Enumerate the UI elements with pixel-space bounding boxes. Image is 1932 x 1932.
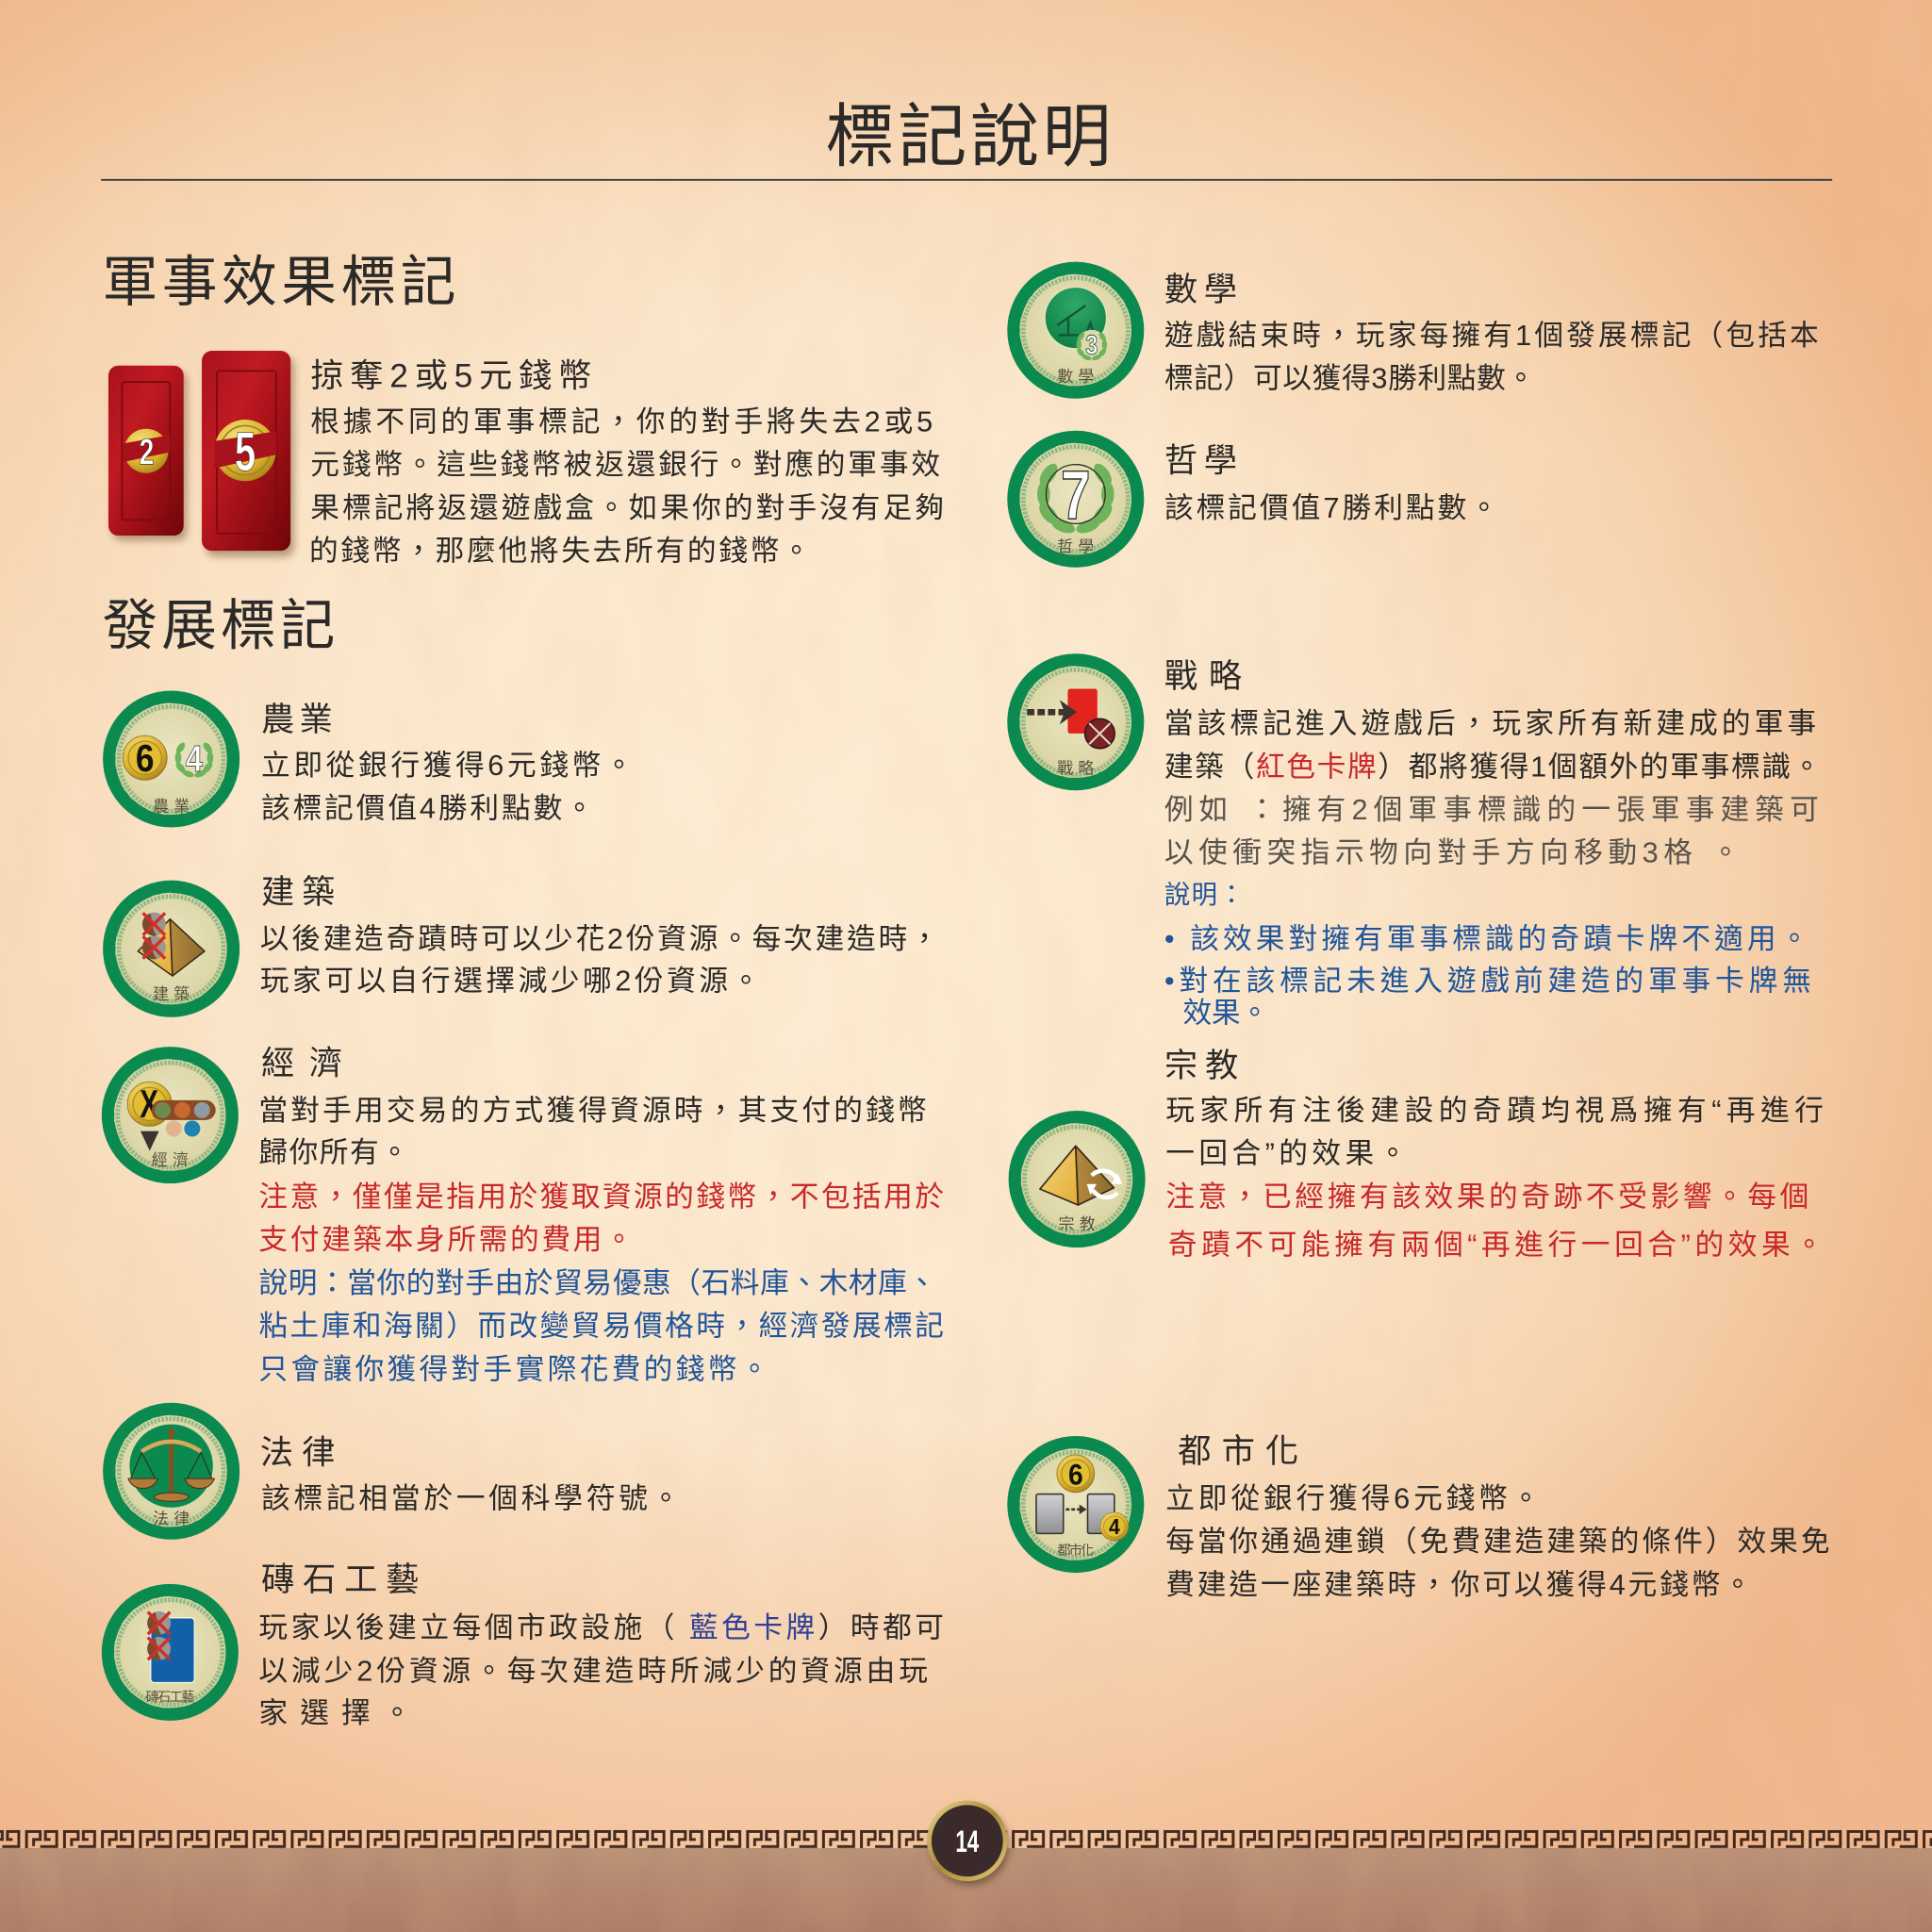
token: urbanism <box>1007 1436 1144 1573</box>
token: law <box>103 1403 239 1540</box>
text: masonry <box>258 1561 944 1729</box>
text: law: 該標記相當於一個科學符號。 <box>261 1481 680 1514</box>
heading: military tokens: 軍事效果標記 <box>102 252 456 313</box>
text: plunder: 的錢幣，那麼他將失去所有的錢幣。 <box>309 535 811 568</box>
text: economy <box>258 1045 944 1385</box>
text: economy: 粘土庫和海關）而改變貿易價格時，經濟發展標記 <box>258 1310 944 1343</box>
token: masonry: 磚石工藝 <box>145 1690 194 1706</box>
text: plunder: 根據不同的軍事標記，你的對手將失去2或5 <box>310 405 933 438</box>
token: agriculture: 6 <box>136 736 154 780</box>
text: economy: 支付建築本身所需的費用。 <box>258 1223 634 1256</box>
text: mathematics <box>1164 272 1819 395</box>
text: strategy: • 該效果對擁有軍事標識的奇蹟卡牌不適用。 <box>1164 922 1808 955</box>
text: urbanism: 都市化 <box>1178 1433 1298 1470</box>
text: theology: 注意，已經擁有該效果的奇跡不受影響。每個 <box>1165 1180 1808 1213</box>
token: economy <box>102 1047 239 1183</box>
text: theology: 宗教 <box>1164 1048 1238 1084</box>
text: theology <box>1164 1048 1824 1261</box>
panel: masonry <box>102 1561 944 1729</box>
token: architecture <box>103 881 239 1017</box>
text: strategy: 說明： <box>1164 880 1245 909</box>
text: architecture: 玩家可以自行選擇減少哪2份資源。 <box>260 965 760 998</box>
token: mathematics: 3 <box>1085 331 1098 361</box>
token: agriculture: 農業 <box>153 798 190 816</box>
text: economy: 當對手用交易的方式獲得資源時，其支付的錢幣 <box>258 1094 927 1127</box>
text: plunder: 掠奪2或5元錢幣 <box>310 357 591 394</box>
text: philosophy: 該標記價值7勝利點數。 <box>1164 491 1498 524</box>
footer greek key border <box>0 1830 1932 1848</box>
text: theology: 奇蹟不可能擁有兩個“再進行一回合”的效果。 <box>1168 1228 1824 1261</box>
token: theology <box>1009 1111 1146 1247</box>
token: architecture: 建築 <box>153 985 190 1003</box>
text: strategy: •對在該標記未進入遊戲前建造的軍事卡牌無 <box>1164 965 1811 998</box>
text: economy: 經濟 <box>261 1045 342 1082</box>
text: urbanism: 費建造一座建築時，你可以獲得4元錢幣。 <box>1165 1568 1752 1601</box>
page number badge: 14 <box>955 1824 979 1858</box>
token: theology: 宗教 <box>1059 1215 1096 1233</box>
text: strategy: 建築（紅色卡牌）都將獲得1個額外的軍事標識。 <box>1164 750 1821 783</box>
icon: military token 5: 5 <box>235 421 256 483</box>
token: agriculture <box>103 690 239 827</box>
text: strategy: 例如 ：擁有2個軍事標識的一張軍事建築可 <box>1164 793 1819 826</box>
text: mathematics: 數學 <box>1164 272 1237 308</box>
token: philosophy: 哲學 <box>1057 537 1094 555</box>
icon: military token 5 <box>202 351 294 557</box>
icon: military token 2 <box>108 366 188 541</box>
token: philosophy: 7 <box>1061 456 1090 534</box>
panel: military tokens <box>102 252 944 568</box>
text: urbanism: 立即從銀行獲得6元錢幣。 <box>1165 1481 1540 1514</box>
panel: theology <box>1009 1048 1824 1261</box>
token: masonry <box>102 1584 239 1721</box>
text: strategy <box>1164 658 1821 1030</box>
token: urbanism: 6 <box>1068 1459 1083 1492</box>
text: law <box>260 1434 680 1514</box>
heading: development tokens: 發展標記 <box>102 595 335 656</box>
text: masonry: 磚石工藝 <box>261 1561 419 1598</box>
panel: mathematics <box>1007 262 1819 399</box>
text: strategy: 當該標記進入遊戲后，玩家所有新建成的軍事 <box>1164 707 1816 740</box>
panel: law <box>103 1403 680 1540</box>
panel: economy <box>102 1045 944 1385</box>
panel: urbanism <box>1007 1433 1830 1601</box>
text: strategy: 以使衝突指示物向對手方向移動3格 。 <box>1164 836 1740 869</box>
text: agriculture: 該標記價值4勝利點數。 <box>261 792 594 825</box>
text: law: 法律 <box>260 1434 335 1471</box>
token: strategy <box>1007 653 1144 790</box>
panel: philosophy <box>1007 431 1498 568</box>
text: theology: 玩家所有注後建設的奇蹟均視爲擁有“再進行 <box>1165 1094 1824 1127</box>
panel: agriculture <box>103 690 634 827</box>
text: philosophy: 哲學 <box>1164 442 1237 479</box>
text: economy: 歸你所有。 <box>258 1135 409 1168</box>
text: plunder: 元錢幣。這些錢幣被返還銀行。對應的軍事效 <box>310 448 940 481</box>
text: plunder <box>309 357 944 568</box>
token: mathematics: 數學 <box>1057 368 1094 386</box>
token: law: 法律 <box>153 1510 190 1527</box>
token: philosophy <box>1007 431 1144 568</box>
text: economy: 說明：當你的對手由於貿易優惠（石料庫、木材庫、 <box>258 1266 936 1299</box>
text: masonry: 以減少2份資源。每次建造時所減少的資源由玩 <box>258 1654 928 1687</box>
text: urbanism: 每當你通過連鎖（免費建造建築的條件）效果免 <box>1165 1525 1830 1558</box>
text: mathematics: 遊戲結束時，玩家每擁有1個發展標記（包括本 <box>1164 319 1819 352</box>
text: urbanism <box>1165 1433 1830 1601</box>
text: mathematics: 標記）可以獲得3勝利點數。 <box>1164 362 1535 395</box>
text: masonry: 玩家以後建立每個市政設施（ 藍色卡牌）時都可 <box>258 1611 944 1644</box>
text: philosophy <box>1164 442 1498 524</box>
token: agriculture: 4 <box>186 739 203 780</box>
token: urbanism: 都市化 <box>1057 1543 1094 1559</box>
text: plunder: 果標記將返還遊戲盒。如果你的對手沒有足夠 <box>310 491 944 524</box>
text: architecture <box>260 874 939 998</box>
text: strategy: 效果。 <box>1182 997 1269 1030</box>
text: strategy: 戰略 <box>1164 658 1242 695</box>
token: economy: X <box>140 1082 158 1126</box>
token: strategy: 戰略 <box>1057 760 1094 778</box>
text: economy: 注意，僅僅是指用於獲取資源的錢幣，不包括用於 <box>258 1180 944 1213</box>
page number badge <box>927 1801 1009 1885</box>
token: economy: 經濟 <box>152 1151 189 1169</box>
text: agriculture: 立即從銀行獲得6元錢幣。 <box>261 749 634 782</box>
title: 標記說明 <box>826 98 1112 175</box>
panel: architecture <box>103 874 939 1017</box>
panel: strategy <box>1007 653 1821 1030</box>
text: architecture: 以後建造奇蹟時可以少花2份資源。每次建造時， <box>260 922 939 955</box>
text: economy: 只會讓你獲得對手實際花費的錢幣。 <box>258 1352 768 1385</box>
text: agriculture: 農業 <box>261 702 333 738</box>
text: architecture: 建築 <box>261 874 335 911</box>
icon: military token 2: 2 <box>140 433 154 473</box>
text: masonry: 家選擇。 <box>258 1696 411 1729</box>
token: urbanism: 4 <box>1109 1514 1120 1539</box>
text: agriculture <box>261 702 634 825</box>
text: theology: 一回合”的效果。 <box>1165 1137 1407 1170</box>
token: mathematics <box>1007 262 1144 399</box>
